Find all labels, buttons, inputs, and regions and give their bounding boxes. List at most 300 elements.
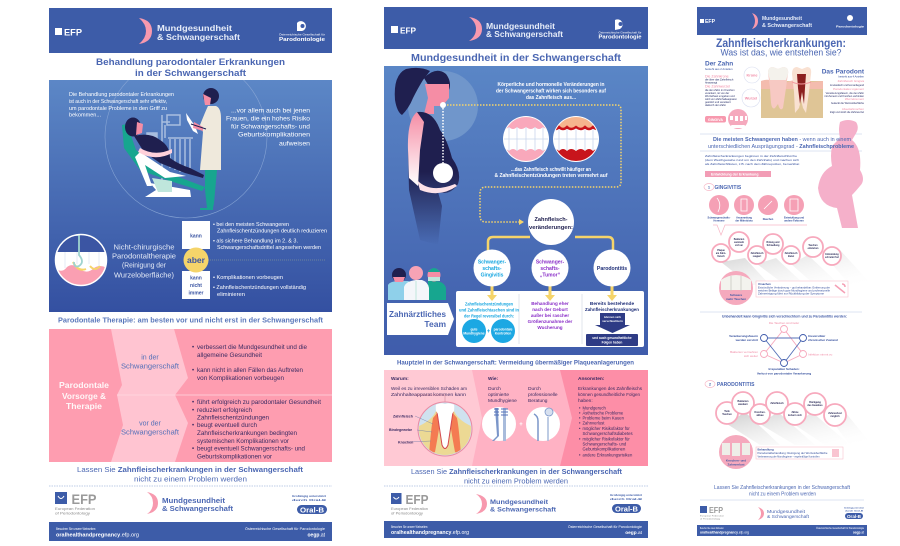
label: during pregnancy: in der [141, 354, 159, 362]
label: crown: Krone [747, 74, 757, 78]
node: periodontitis: Parodontitis [597, 266, 627, 272]
intro text right [226, 108, 310, 148]
list: consequences: Ästhetische Probleme [582, 410, 624, 416]
label: before pregnancy [121, 420, 179, 436]
diagram: progression cycle: Infektion nimmt zu [808, 352, 833, 356]
poster 1 header band [49, 8, 332, 53]
text: how: optimierte [488, 392, 509, 398]
block: the tooth: wird vom Zahnhalteapparat [705, 97, 737, 101]
closing statement: nicht zu einem Problem werden [749, 492, 816, 498]
label: preventive care: Parodontale [59, 381, 109, 390]
list: during pregnancy: verbessert die Mundgesundheit und die [197, 345, 308, 351]
block: the periodontium: trägt und stützt die Zahnwurzel [830, 111, 864, 114]
text: otherwise: haben: [578, 398, 593, 404]
block: the periodontium: mit Zement und Knochen verbinden [824, 95, 865, 98]
list: before pregnancy: systemischen Komplikationen vor [197, 439, 289, 445]
text: tumor: Wucherung [537, 325, 563, 330]
list: before pregnancy: • [192, 408, 194, 414]
box: periodontitis treatment [756, 447, 843, 459]
block: the periodontium [822, 68, 865, 114]
bubbles: periodontitis stages: Taschen [722, 413, 732, 416]
poster 3 title: Zahnfleischerkrankungen: [716, 36, 846, 50]
panel: why, how, otherwise: + [519, 422, 523, 428]
logo: Oral-B: Oral-B [615, 506, 638, 514]
logo: campaign: Mundgesundheit [767, 509, 806, 514]
bubbles: gingivitis stages: Zahnfleisch [751, 253, 764, 255]
block: the periodontium: besteht aus 4 Anteilen [838, 74, 865, 78]
list: kann nicht immer: eliminieren [217, 292, 245, 298]
list: during pregnancy: • [192, 368, 194, 374]
banner: disease development: Entwicklung der Erkrankung [711, 172, 758, 176]
poster 2 title: Mundgesundheit in der Schwangerschaft [411, 52, 622, 64]
box: kann: kann [190, 234, 202, 240]
text: otherwise: können gesundheitliche Folgen [578, 392, 640, 398]
node: pregnancy gingivitis: schafts- [482, 266, 502, 272]
node: pregnancy tumor: Schwanger- [536, 260, 565, 266]
closing statement: Lassen Sie Zahnfleischerkrankungen in der Schwangerschaft [411, 467, 622, 476]
icons: gingivitis risk factors: Ansammlung [736, 216, 752, 220]
footer band [384, 521, 648, 538]
poster 1 header band: Österreichische Gesellschaft für [279, 32, 325, 36]
text: how [488, 376, 558, 404]
intro paragraph: Zahnfleischerkrankungen beginnen in der Zahnfleischfurche [705, 154, 797, 158]
intro paragraph: (dem Weichgewebe rund um den Zahnhals) und machen sich [705, 158, 799, 162]
list: before pregnancy: • [192, 446, 194, 452]
block: the tooth: hinausragt [705, 80, 717, 84]
footer band: oegp.at [307, 532, 326, 538]
node: periodontitis [594, 250, 630, 286]
block: the periodontium: bedeckt die Wurzeloberfläche [831, 102, 865, 105]
tooth labels [389, 414, 413, 444]
intro text left [69, 92, 174, 118]
label: preventive care: Therapie [66, 402, 102, 411]
poster 2 header band: Österreichische Gesellschaft für [598, 30, 642, 34]
footer band: oegp.at [625, 530, 643, 536]
bubbles: periodontitis stages: Knochen- [754, 411, 766, 414]
bubbles: periodontitis stages: Tiefe [724, 410, 730, 413]
arrow: can worsen [595, 313, 630, 333]
list: kann: Zahnfleischentzündungen deutlich reduzieren [217, 228, 327, 234]
poster 2 header band: Mundgesundheit [486, 22, 555, 31]
list: before pregnancy: beugt eventuell durch [197, 423, 257, 429]
list: kann: • als sichere Behandlung im 2. & 3. [213, 238, 298, 244]
bubbles: periodontitis stages: Zahnfleisch [770, 402, 784, 405]
poster 2 header band: EFP [400, 26, 416, 36]
logo: campaign [147, 492, 234, 514]
therapy label: Nicht-chirurgische [114, 244, 175, 252]
list: during pregnancy: • [192, 345, 194, 351]
closing statement [77, 465, 304, 484]
text: periodontitis: Bereits bestehende [590, 301, 634, 307]
therapy label [112, 244, 176, 280]
icons: gingivitis risk factors: Schwangerschafts- [708, 216, 731, 220]
text: how: Wie: [488, 376, 498, 382]
bubbles: gingivitis stages: sammeln [734, 242, 745, 244]
box: periodontitis treatment: Parodontalbehandlung: Reinigung der Wurzeloberfläche [758, 451, 828, 455]
icon: periodontitis teeth [719, 435, 753, 469]
bubbles: periodontitis stages: Bakterien [738, 400, 749, 403]
label: before pregnancy: Schwangerschaft [121, 430, 179, 436]
list: before pregnancy: führt erfolgreich zu parodontaler Gesundheit [197, 400, 321, 406]
block: the periodontium: Parodontales Ligament [833, 87, 864, 91]
illustration: pregnant woman [395, 68, 478, 245]
tooth labels: Bindegewebe [389, 428, 412, 432]
text: tumor: Behandlung eher [531, 301, 569, 306]
label: crown [744, 67, 760, 83]
label: preventive care [59, 381, 109, 411]
heading: gingivitis: 1 [708, 186, 710, 190]
block: the tooth: die über das Zahnfleisch [705, 78, 734, 82]
intro paragraph: als Zahnfleischbluten, z.B. nach dem Zähneputzen, bemerkbar. [705, 162, 800, 166]
block: the periodontium: Zahnfleisch Gingiva [838, 79, 864, 83]
text: how: Mundhygiene [488, 398, 517, 404]
card: outcomes: + [487, 329, 491, 335]
logo: Oral-B: Großzügig unterstützt [610, 493, 642, 497]
list: during pregnancy: von Komplikationen vorbeugen [197, 376, 284, 382]
block: the periodontium: Wurzelzement [845, 97, 864, 101]
bubbles: periodontitis stages: des Gewebes [807, 404, 823, 407]
bubbles: periodontitis stages: wandern [738, 403, 748, 406]
block: the tooth: die den Zahn im Knochen [705, 88, 735, 92]
badge: periodontal checkups [491, 319, 515, 343]
text: gingivitis: Zahnfleischentzündungen [465, 302, 513, 306]
text: gums swell: ...das Zahnfleisch schwillt häufiger an [511, 167, 591, 173]
text: periodontitis [585, 301, 639, 313]
tooth labels: Knochen [398, 440, 413, 444]
poster 2 header band: Parodontologie [598, 34, 642, 40]
footer band: oralhealthandpregnancy.efp.org [56, 532, 139, 538]
text: how: Beratung [528, 398, 548, 404]
icons: gingivitis risk factors: Entwicklung und [784, 216, 804, 220]
logo: campaign: & Schwangerschaft [162, 506, 234, 513]
logo: Oral-B: Großzügig unterstützt [292, 494, 326, 498]
block: the tooth [705, 60, 748, 129]
closing statement: nicht zu einem Problem werden [134, 474, 247, 484]
diagram: progression cycle: Irreversibler [808, 334, 826, 338]
illustration: tooth anatomy [761, 67, 823, 118]
bubbles: periodontitis stages: abbau [756, 414, 764, 417]
text: gingivitis: und Zahnfleischtaschen sind in [459, 308, 519, 312]
logo: EFP [700, 506, 725, 520]
diagram: progression cycle: Bakterien vermehren [730, 350, 758, 354]
bubbles: gingivitis stages: fleisch [717, 256, 725, 258]
arrow: dotted path to gum changes [447, 105, 621, 225]
bubbles: gingivitis stages: entstehen [808, 247, 819, 250]
box: kann nicht immer: immer [188, 290, 204, 296]
poster 3 title [716, 36, 846, 58]
list: consequences: • [579, 416, 580, 420]
bubbles: periodontitis stages: Zähne [791, 411, 799, 414]
panel: preventive care [49, 329, 332, 462]
text: why [391, 376, 467, 398]
poster 2 header band [384, 7, 648, 49]
bubbles: gingivitis stages: schreitet fort [825, 256, 839, 259]
shadows behind gingivitis bubbles [721, 250, 872, 285]
list: consequences: Mundgeruch [582, 406, 606, 410]
heading: gingivitis [704, 184, 742, 191]
closing statement: Lassen Sie Zahnfleischerkrankungen in der Schwangerschaft [714, 485, 851, 491]
statement: most pregnant women [708, 137, 854, 150]
intro text right: Frauen, die ein hohes Risiko [226, 116, 310, 122]
block: the tooth: besteht aus 2 Anteilen [705, 67, 733, 71]
text: why: Weil es zu irreversiblen Schäden am [391, 386, 467, 392]
icon: periodontitis teeth: Zahnverlust [727, 462, 745, 466]
bubbles: gingivitis stages: Rötung und [767, 241, 780, 244]
icon: periodontitis teeth: Knochen- und [726, 458, 746, 462]
intro text left: um parodontale Probleme in den Griff zu [69, 106, 167, 112]
logo: campaign: & Schwangerschaft [490, 506, 557, 514]
node: pregnancy tumor: schafts- [540, 266, 560, 272]
list: before pregnancy: • [192, 400, 194, 406]
bubbles: gingivitis stages: reagiert [753, 255, 761, 258]
closing statement: Lassen Sie Zahnfleischerkrankungen in der Schwangerschaft [77, 465, 304, 474]
label: gingiva: GINGIVA [708, 118, 723, 122]
poster 1 title: Behandlung parodontaler Erkrankungen [96, 57, 285, 68]
badge: oral hygiene: Mundhygiene [463, 332, 485, 336]
node: pregnancy gingivitis: Gingivitis [481, 272, 504, 278]
bubbles: periodontitis stages: lockern sich [788, 414, 803, 417]
list: before pregnancy: Geburtskomplikationen vor [197, 454, 272, 460]
icon: gingivitis teeth [719, 271, 753, 305]
footer band: oralhealthandpregnancy .efp.org [391, 530, 469, 536]
logo: campaign: Mundgesundheit [490, 499, 549, 506]
footer band: Österreichische Gesellschaft für Parodontologie [816, 527, 865, 530]
icons: gingivitis risk factors: der Mikrobiota [735, 220, 753, 222]
logo: EFP: European Federation [700, 514, 725, 518]
footer band: Besuchen Sie unsere Webseiten: [56, 527, 96, 531]
list: consequences: Probleme beim Kauen [582, 416, 625, 420]
list: before pregnancy: Zahnfleischentzündungen [197, 416, 269, 422]
box: kann [182, 221, 210, 249]
intro text left: Die Behandlung parodontaler Erkrankungen [69, 92, 174, 98]
list: before pregnancy [192, 400, 321, 460]
intro text right: ...vor allem auch bei jenen [231, 108, 310, 114]
poster 1 header band: & Schwangerschaft [157, 32, 240, 42]
icon: dental instruments [526, 407, 560, 441]
box: kann nicht immer [182, 271, 210, 299]
icon: root surface cleaning teeth circle [55, 234, 107, 290]
list: consequences: • [579, 452, 580, 458]
list: before pregnancy: beugt eventuell Schwangerschafts- und [197, 446, 305, 452]
block: the tooth: gestützt und verankert [705, 100, 731, 104]
footer band: oegp.at [853, 530, 864, 534]
node: pregnancy gingivitis [474, 250, 510, 286]
poster 1 header band: EFP [64, 28, 82, 38]
list: consequences: Schwangerschafts- und [582, 442, 627, 446]
logo: EFP: EFP [406, 492, 429, 507]
illustration: dentist [186, 88, 221, 210]
bubbles: gingivitis stages: Taschen [808, 245, 818, 247]
box: kann nicht immer: kann [190, 276, 202, 282]
heading: periodontitis: 2 [709, 382, 711, 386]
list: kann: Schwangerschaftsdrittel angesehen werden [217, 245, 321, 251]
illustration: dental team [388, 266, 446, 300]
text: how: Durch [488, 386, 501, 392]
arrow label: dental team [387, 303, 454, 335]
poster 1 title: in der Schwangerschaft [135, 68, 247, 79]
list: before pregnancy: reduziert erfolgreich [197, 408, 252, 414]
diagram: progression cycle: Die Taschen sind tiefer [769, 321, 799, 325]
logo: EFP: of Periodontology [700, 518, 721, 520]
list: consequences [579, 406, 633, 458]
label: preventive care: Vorsorge & [62, 392, 106, 401]
intro text right: Geburtskomplikationen [238, 132, 310, 138]
logo: Oral-B: Oral-B [847, 514, 862, 519]
text: hormonal changes [496, 82, 606, 101]
banner: disease development [705, 171, 771, 177]
icons: gingivitis risk factors [708, 195, 804, 222]
intro text left: bekommen... [69, 112, 101, 118]
block: the tooth: Der Zahn [705, 60, 733, 68]
closing statement [411, 467, 622, 486]
text: gingivitis [459, 302, 519, 318]
statement: most pregnant women: Die meisten Schwangeren haben - wenn auch in einem [713, 137, 851, 143]
logo: Oral-B: durch Oral-B [610, 497, 643, 501]
poster 3 header band: Mundgesundheit [762, 16, 802, 22]
illustration: tooth cross section [409, 395, 472, 458]
icon: gingivitis teeth: mehr Taschen [726, 297, 746, 301]
text: tumor: Größenzunahme der [528, 319, 573, 324]
logo: Oral-B: durch Oral-B [845, 510, 864, 512]
node: pregnancy tumor [532, 250, 568, 286]
icon: inflamed gums [553, 116, 599, 162]
logo: campaign: Mundgesundheit [162, 498, 226, 505]
box: health consequences [586, 334, 638, 346]
text: gums swell [494, 167, 608, 179]
illustration: patient in dental chair [122, 118, 205, 197]
poster 1 header band: Mundgesundheit [157, 23, 232, 33]
diagram: progression cycle: sich weiter [744, 354, 758, 358]
logo: EFP [391, 492, 429, 516]
tooth labels: Zahnfleisch [393, 414, 413, 418]
diagram: progression cycle: werden zerstört [735, 338, 758, 342]
text: why: Zahnhalteapparat kommen kann [391, 392, 466, 398]
box: health consequences: Folgen haben [602, 340, 622, 344]
box: gingivitis treatment: weichen Beläge durch gute Mundhygiene und professionelle [758, 288, 830, 292]
list: consequences: • [579, 406, 580, 410]
logo: EFP: of Periodontology [391, 512, 423, 516]
shadows behind periodontitis bubbles [727, 412, 868, 445]
node: gum changes [528, 199, 574, 245]
illustration: dental equipment [147, 115, 193, 180]
poster 2 header band: & Schwangerschaft [486, 30, 563, 39]
list: before pregnancy: Zahnfleischerkrankungen bedingten [197, 431, 297, 437]
logo: campaign [476, 494, 557, 514]
box: gingivitis treatment: Zahnreinigung führt zur Rückbildung der Symptome [758, 292, 824, 296]
arrow label: dental team: Team [424, 319, 446, 329]
block: the tooth: verankert, ist von der [705, 91, 729, 95]
text: hormonal changes: das Zahnfleisch aus... [526, 95, 576, 101]
heading: gingivitis: GINGIVITIS [714, 185, 742, 191]
arrow label: dental team: Zahnärztliches [389, 309, 446, 319]
text: otherwise: Erkrankungen des Zahnfleischs [578, 386, 643, 392]
logo: EFP: European Federation [391, 507, 428, 511]
logo: EFP [55, 491, 96, 516]
block: the periodontium: Alveolarknochen [842, 107, 864, 111]
logo: EFP: EFP [72, 491, 96, 507]
diagram: progression cycle: Irreparabler Schaden: [768, 367, 800, 371]
intro paragraph [705, 154, 800, 166]
arrows: down from nodes to card [487, 286, 617, 301]
poster 1 header band: Parodontologie [279, 37, 325, 43]
heading: periodontitis [705, 380, 755, 388]
statement: most pregnant women: unterschiedlichen Ausprägungsgrad - Zahnfleischprobleme [708, 144, 854, 150]
list: kann nicht immer: • Zahnfleischentzündungen vollständig [213, 285, 306, 291]
footer band [49, 522, 332, 541]
list: kann [213, 222, 327, 251]
poster 3 header band: Parodontologie [836, 24, 865, 28]
icon: gingivitis teeth: Schwere [730, 293, 742, 297]
list: consequences: Schwangerschaftsdiabetes [582, 431, 633, 436]
poster 3 header band [697, 7, 867, 35]
logo: Oral-B [844, 506, 864, 519]
card: outcomes [456, 291, 644, 347]
therapy label: Wurzeloberfläche) [114, 272, 174, 280]
list: consequences: möglicher Risikofaktor für [582, 436, 630, 442]
label: before pregnancy: vor der [139, 420, 162, 428]
list: consequences: andere Erkrankungsrisiken [582, 452, 633, 458]
label: during pregnancy: Schwangerschaft [121, 364, 179, 370]
list: consequences: möglicher Risikofaktor für [582, 426, 630, 431]
logo: Oral-B: durch Oral-B [292, 498, 328, 502]
poster 3 header band: EFP [705, 19, 715, 25]
footer band: Besuchen Sie unsere Webseiten: [700, 527, 724, 530]
panel: why, how, otherwise [384, 370, 648, 466]
block: the periodontium: ist elastisch und fest anliegend [830, 84, 865, 87]
logo: campaign: & Schwangerschaft [767, 514, 810, 519]
logo: Oral-B: Oral-B [300, 508, 324, 514]
footer band: Besuchen Sie unsere Webseiten: [391, 525, 428, 529]
bubbles: gingivitis stages: Zahnfleisch [785, 253, 798, 255]
poster 1 title [96, 57, 285, 79]
node: gum changes: Zahnfleisch- [534, 217, 568, 223]
panel: non-surgical therapy [49, 56, 332, 312]
intro text left: ist auch in der Schwangerschaft sehr effektiv, [69, 99, 167, 105]
list: kann nicht immer [213, 275, 306, 298]
block: the tooth: Die Zahnkrone [705, 74, 729, 78]
text: why: Warum: [391, 376, 409, 382]
icons: gingivitis risk factors: Hormone [714, 220, 725, 222]
poster 1: treatment of periodontal disease in pregnancy [49, 8, 332, 541]
box: health consequences: und auch gesundheitliche [592, 336, 632, 340]
list: consequences: Zahnverlust [582, 420, 605, 426]
label: root: Wurzel [745, 96, 757, 100]
footer band [697, 525, 867, 536]
badge: periodontal checkups: Kontrollen [495, 332, 511, 336]
subheading: main goal: Hauptziel in der Schwangerschaft: Vermeidung übermäßiger Plaqueanlagerungen [397, 360, 634, 366]
block: the periodontium: Verankerungsfasern, die den Zahn [826, 92, 865, 95]
closing statement [714, 485, 851, 498]
box: gingivitis treatment [756, 281, 848, 297]
bubbles: periodontitis stages: Zahnverlust [828, 412, 842, 415]
logo: EFP: of Periodontology [55, 512, 90, 516]
arrow: can worsen: können sich [604, 315, 621, 319]
bubbles: gingivitis stages: Bakterien [734, 238, 745, 241]
box: periodontitis treatment: Behandlung [758, 448, 774, 452]
diagram: progression cycle [729, 321, 838, 376]
block: the tooth: Wurzelhaut umgeben und [705, 94, 735, 98]
icon: toothbrushes [482, 407, 516, 441]
list: consequences: • [579, 426, 580, 431]
block: the periodontium: Das Parodont [822, 68, 865, 76]
list: before pregnancy: • [192, 423, 194, 429]
diagram: progression cycle: Verlust von parodontaler Verankerung [757, 372, 811, 376]
list: consequences: • [579, 420, 580, 426]
bubbles: gingivitis stages: Schwellung [767, 245, 780, 247]
list: kann nicht immer: • Komplikationen vorbeugen [213, 275, 283, 281]
bubbles: gingivitis stages [712, 232, 841, 265]
bubbles: gingivitis stages: sich an [735, 245, 744, 247]
